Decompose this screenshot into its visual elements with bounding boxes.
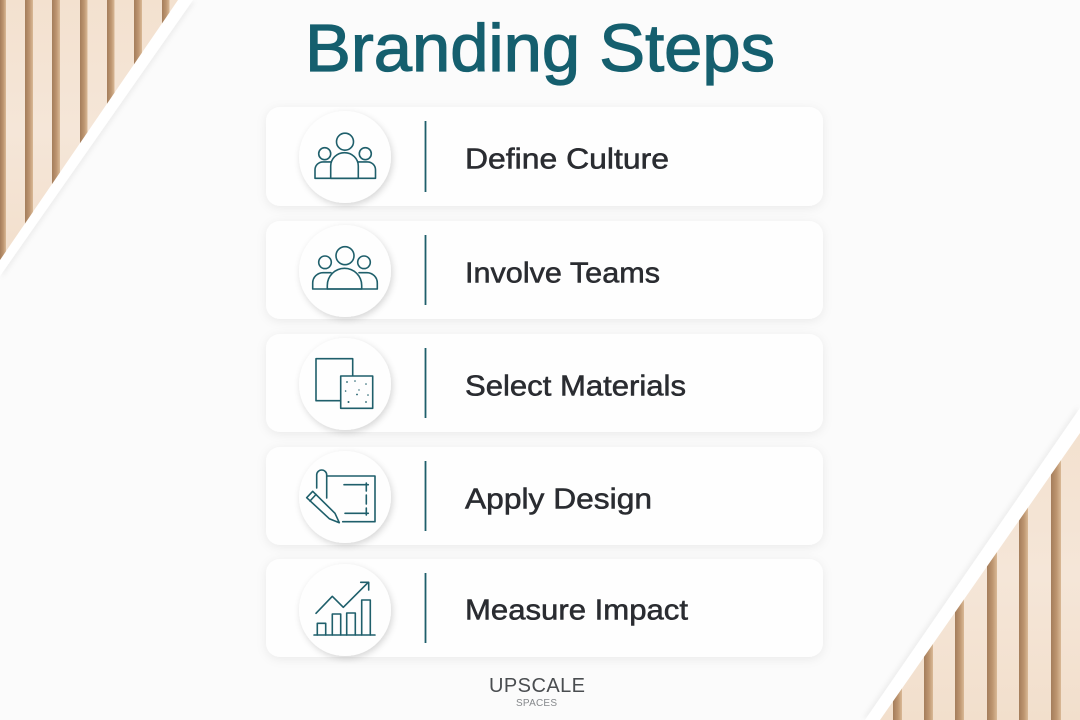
panel: step 4 Apply Design: Apply Design — [465, 484, 652, 516]
icon: culture group — [315, 133, 376, 178]
panel: step 3 Select Materials: Select Materials — [465, 370, 686, 402]
logo: Upscale Spaces: UPSCALE — [489, 675, 585, 697]
icon: material swatches — [316, 359, 373, 408]
panel: step 3 Select Materials — [266, 334, 823, 432]
logo: Upscale Spaces — [489, 675, 585, 709]
panel: step 5 Measure Impact: Measure Impact — [465, 594, 688, 626]
panel: step 2 Involve Teams: Involve Teams — [465, 258, 660, 290]
title: Branding Steps — [305, 11, 775, 86]
decorative wood panel: top left — [0, 0, 193, 276]
panel: step 1 Define Culture: Define Culture — [465, 144, 669, 176]
logo: Upscale Spaces: SPACES — [516, 698, 557, 709]
panel: step 2 Involve Teams — [266, 221, 823, 319]
icon: blueprint and pencil — [307, 470, 375, 523]
icon: growth chart — [314, 582, 375, 635]
panel: step 1 Define Culture — [266, 107, 823, 206]
panel: step 5 Measure Impact — [266, 559, 823, 657]
decorative wood panel: bottom right — [865, 408, 1080, 720]
icon: team group — [313, 247, 377, 289]
panel: step 4 Apply Design — [266, 447, 823, 545]
